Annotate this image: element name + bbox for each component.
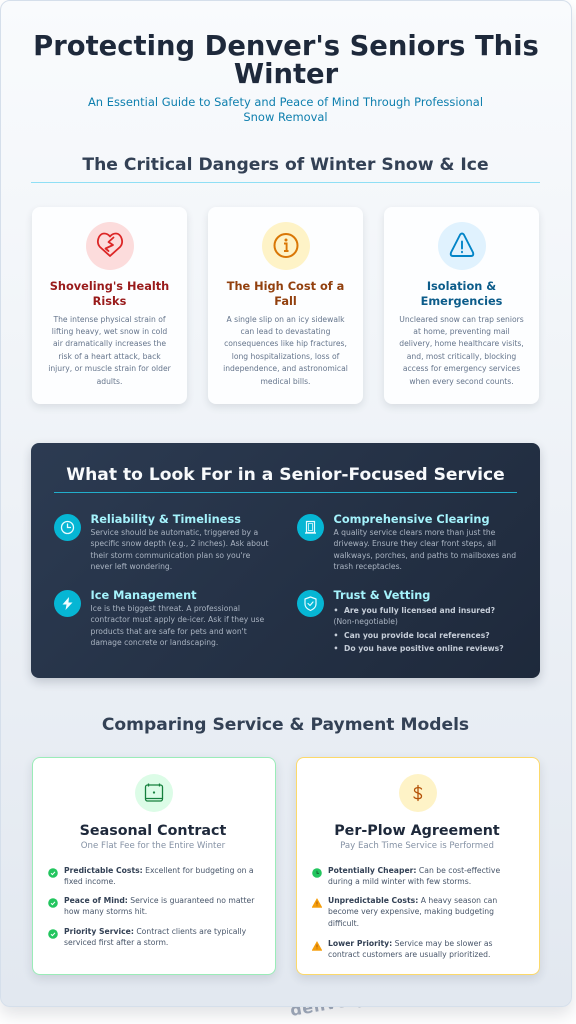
icon: check [48, 868, 58, 878]
feature text: Ice is the biggest threat. A professional [90, 604, 240, 613]
feature: clearing [297, 512, 516, 571]
panel: what to look for [31, 443, 540, 678]
feature: reliability [54, 512, 268, 571]
heading: dangers: The Critical Dangers of Winter Snow & Ice [82, 155, 489, 175]
icon: broken heart [86, 222, 134, 270]
item text [328, 866, 500, 886]
card text: medical bills. [260, 377, 310, 386]
icon: check [48, 929, 58, 939]
item text [64, 926, 246, 947]
icon: info [262, 222, 310, 270]
card title: The High Cost of a [227, 278, 344, 292]
checklist: Do you have positive online reviews? [344, 644, 504, 653]
checklist: (Non-negotiable) [334, 617, 398, 626]
item text: become very expensive, making budgeting [328, 907, 494, 916]
card subtitle: One Flat Fee for the Entire Winter [81, 840, 225, 850]
item text: Unpredictable Costs: A heavy season can [328, 896, 497, 905]
feature text: specific snow depth (e.g., 2 inches). Ask about [90, 539, 268, 548]
item text [328, 896, 497, 928]
icon: clock badge [312, 868, 322, 878]
card text: lifting heavy, wet snow in cold [52, 327, 167, 336]
watermark: denverplow [289, 982, 402, 1020]
item text: Priority Service: Contract clients are typically [64, 926, 246, 936]
card text: A single slip on an icy sidewalk [226, 314, 345, 324]
card title [50, 278, 169, 308]
feature: trust [297, 588, 504, 653]
item text: Potentially Cheaper: Can be cost-effective [328, 866, 500, 874]
feature: ice [54, 588, 264, 647]
feature title: Trust & Vetting [334, 588, 430, 602]
icon: dollar [398, 774, 436, 812]
feature text: trash receptacles. [334, 562, 402, 571]
item: predictable [48, 866, 254, 886]
panel heading: What to Look For in a Senior-Focused Service [66, 464, 505, 484]
checklist: Are you fully licensed and insured? [344, 606, 495, 615]
panel: health risks [32, 207, 187, 404]
item text: difficult. [328, 919, 359, 928]
feature text [90, 528, 268, 571]
feature title: Ice Management [90, 588, 197, 602]
title: Winter [234, 58, 338, 90]
feature title: Reliability & Timeliness [90, 512, 241, 526]
item text [328, 938, 493, 959]
checklist: • [334, 606, 338, 615]
panel: isolation [384, 207, 539, 404]
card text [223, 314, 348, 386]
item text: during a mild winter with few storms. [328, 877, 471, 886]
checklist: • [334, 630, 338, 640]
card title [226, 278, 344, 308]
feature title: Comprehensive Clearing [334, 512, 490, 526]
icon: shield [297, 590, 324, 617]
card text: consequences like hip fractures, [224, 339, 347, 348]
item: priority [48, 926, 246, 947]
item text: fixed income. [64, 877, 116, 886]
subtitle: Snow Removal [243, 110, 328, 124]
header [33, 30, 539, 124]
heading: comparing models: Comparing Service & Payment Models [102, 715, 469, 735]
item: peace of mind [48, 896, 254, 916]
card text: independence, and astronomical [223, 364, 348, 373]
feature text: driveway. Ensure they clear front steps, all [334, 539, 496, 548]
card text: The intense physical strain of [53, 314, 166, 324]
item text: contract customers are usually prioritized. [328, 950, 490, 959]
card title: Emergencies [421, 294, 502, 308]
feature text: damage concrete or landscaping. [90, 638, 218, 647]
card text: delivery, home healthcare visits, [399, 339, 524, 348]
subtitle [88, 94, 483, 124]
checklist: Can you provide local references? [344, 630, 490, 640]
card text: air dramatically increases the [53, 339, 166, 348]
card text: at home, preventing mail [413, 327, 510, 336]
feature text: never left wondering. [90, 562, 172, 571]
card title: Per-Plow Agreement [334, 823, 500, 839]
icon: bolt [54, 590, 81, 617]
feature text: walkways, porches, and paths to mailboxes and [334, 551, 516, 560]
card text: Uncleared snow can trap seniors [399, 314, 524, 324]
item text [64, 896, 254, 916]
card text: access for emergency services [403, 364, 520, 373]
feature text [90, 604, 264, 647]
card text: long hospitalizations, loss of [232, 352, 339, 361]
item text: Peace of Mind: Service is guaranteed no matter [64, 896, 254, 905]
feature text: contractor must apply de-icer. Ask if they use [90, 615, 264, 624]
title [33, 30, 539, 90]
card title: Seasonal Contract [80, 823, 226, 839]
panel: seasonal contract [32, 757, 276, 975]
card title: Isolation & [427, 278, 496, 292]
icon: clock [54, 514, 81, 541]
card text [48, 314, 171, 386]
icon: check [48, 898, 58, 908]
feature text: their storm communication plan so you're [90, 551, 250, 560]
card text [399, 314, 524, 386]
icon: door [297, 514, 324, 541]
item text: Lower Priority: Service may be slower as [328, 938, 493, 948]
subtitle: An Essential Guide to Safety and Peace of Mind Through Professional [88, 94, 483, 108]
checklist: • [334, 644, 338, 653]
item text: Predictable Costs: Excellent for budgeting on a [64, 866, 254, 874]
item: cheaper [312, 866, 500, 886]
feature text: products that are safe for pets and won't [90, 627, 247, 636]
card title [421, 278, 502, 308]
item text [64, 866, 254, 886]
card text: and, most critically, blocking [407, 352, 516, 361]
item: unpredictable [312, 896, 497, 928]
card text: adults. [97, 377, 122, 386]
icon: warning badge [312, 898, 322, 908]
feature text: A quality service clears more than just the [334, 528, 495, 537]
card text: when every second counts. [409, 377, 514, 386]
icon: warning badge [312, 941, 322, 951]
title: Protecting Denver's Seniors This [33, 30, 539, 62]
card text: risk of a heart attack, back [58, 352, 161, 361]
item: lower priority [312, 938, 493, 959]
item text: how many storms hit. [64, 907, 147, 916]
feature text [334, 528, 516, 571]
card title: Shoveling's Health [50, 278, 169, 292]
panel: cost of a fall [208, 207, 363, 404]
card title: Fall [274, 294, 297, 308]
card text: can lead to devastating [241, 327, 330, 336]
checklist [334, 606, 504, 653]
panel: per-plow agreement [296, 757, 540, 975]
card title: Risks [93, 294, 126, 308]
feature text: Service should be automatic, triggered by a [90, 528, 258, 537]
card text: injury, or muscle strain for older [48, 364, 171, 373]
card subtitle: Pay Each Time Service is Performed [340, 840, 494, 850]
icon: calendar [134, 774, 172, 812]
item text: serviced first after a storm. [64, 938, 168, 947]
icon: warning [438, 222, 486, 270]
